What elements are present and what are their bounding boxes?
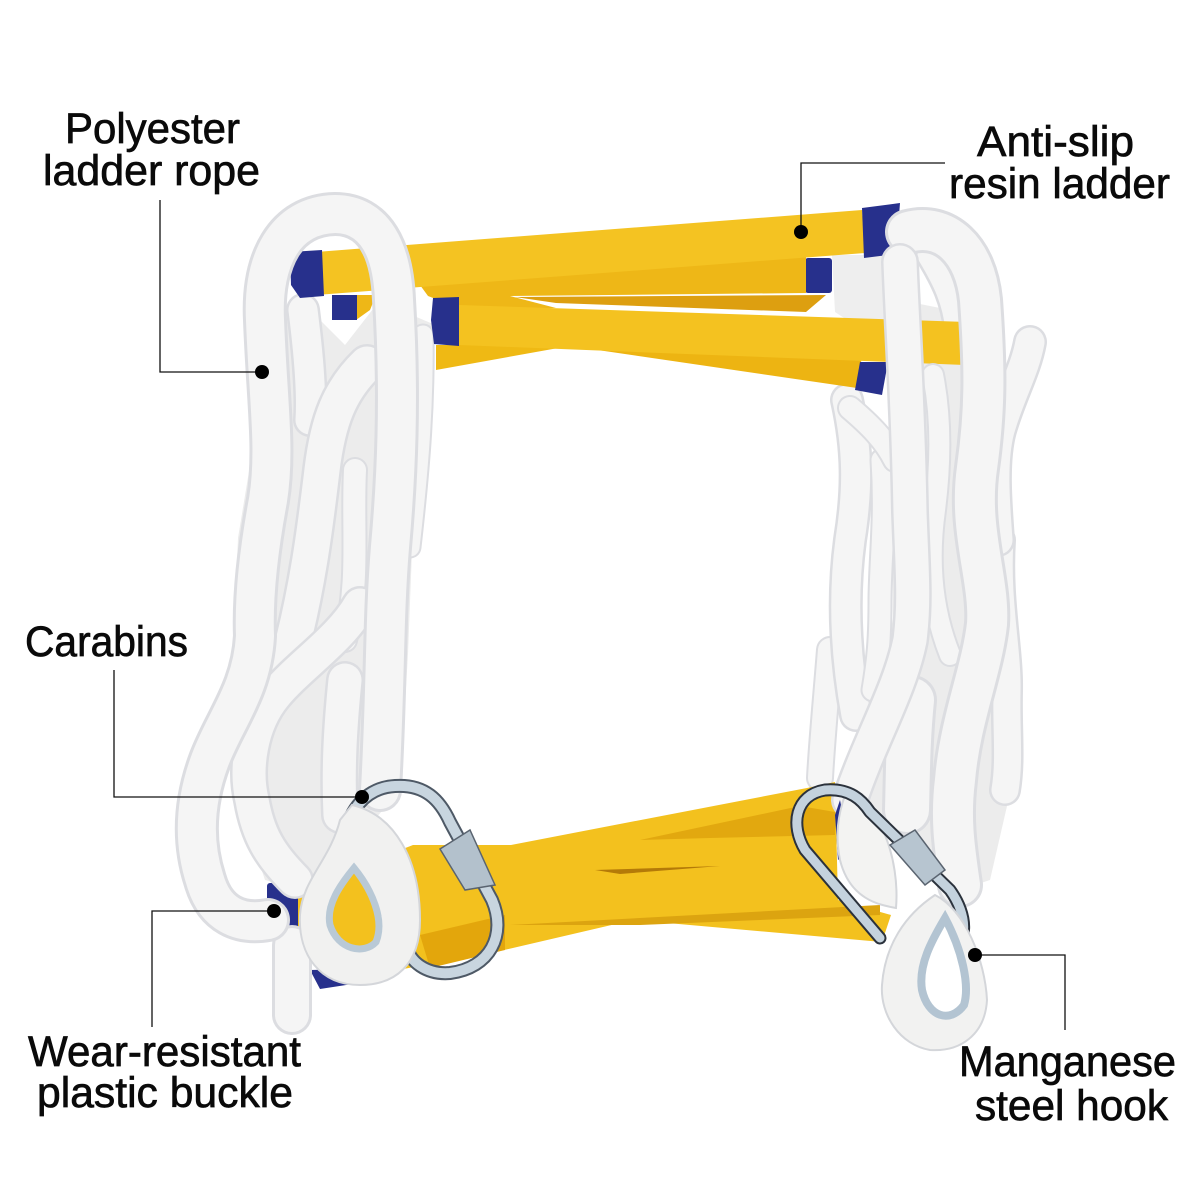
loop steel eye [329, 868, 379, 949]
leader line [114, 670, 362, 797]
rope teardrop [838, 795, 897, 908]
bottom ladder rungs [267, 782, 891, 989]
heading line two: plastic buckle [37, 1069, 293, 1117]
leader line [160, 200, 262, 372]
hook eye [921, 918, 966, 1016]
inner strand [287, 364, 367, 665]
left rope mass [233, 300, 433, 890]
thimble rope loop [300, 805, 420, 985]
blue sliver [372, 362, 382, 383]
carabiner locking sleeve [440, 830, 495, 890]
callout: polyester ladder rope [43, 105, 269, 379]
carabiner body [797, 790, 964, 955]
upper rung left cap [290, 250, 324, 298]
heading line two: ladder rope [43, 147, 260, 195]
rung small cap [332, 295, 357, 320]
main right ropes [850, 230, 1030, 885]
blue buckle left [267, 883, 298, 935]
blue buckle bottom [310, 968, 398, 989]
right outer rope [995, 342, 1030, 540]
callout: wear-resistant plastic buckle [28, 904, 301, 1117]
carabiner steel ring [343, 786, 497, 973]
left carabiner and rope loop [300, 786, 497, 985]
dot [255, 365, 269, 379]
rear rung right cap [805, 258, 832, 293]
lower strand [249, 605, 360, 880]
main rope: lower loop, left arm, arch and right arm [197, 214, 397, 921]
leader line [975, 955, 1065, 1030]
heading: Manganese [959, 1038, 1176, 1086]
main left ropes [197, 214, 397, 1015]
front yellow rung [459, 305, 967, 365]
right thin strand [932, 375, 950, 655]
dot [355, 790, 369, 804]
top rope behind rung [930, 255, 958, 330]
rear yellow rung [420, 256, 806, 308]
callout: anti-slip resin ladder [794, 118, 1170, 239]
upper rung right cap [862, 203, 900, 258]
leader line [152, 911, 274, 1027]
upper yellow rung [316, 210, 865, 295]
top ladder rungs [290, 203, 967, 395]
heading: Polyester [65, 105, 240, 153]
lower right rung piece [577, 347, 862, 388]
dark wedge [515, 295, 826, 312]
heading: Carabins [25, 618, 188, 666]
dot [794, 225, 808, 239]
heading line two: steel hook [975, 1082, 1168, 1130]
heading: Wear-resistant [28, 1028, 301, 1076]
heading: Anti-slip [977, 118, 1134, 166]
small yellow stub [356, 295, 376, 320]
dot [968, 948, 982, 962]
white buckle block [832, 255, 897, 345]
callout: carabins [25, 618, 369, 804]
yellow rung fan [298, 782, 891, 970]
front rung left cap [431, 297, 459, 346]
right inner rope [850, 262, 913, 800]
rung shadows [420, 806, 880, 968]
heading line two: resin ladder [949, 160, 1170, 208]
right rope mass [820, 255, 1013, 890]
right carabiner and rope loop [797, 790, 987, 1050]
dark backing [835, 800, 850, 860]
leader line [801, 163, 945, 232]
right arch rope [908, 230, 987, 885]
callout: manganese steel hook [959, 948, 1176, 1130]
diagonal strand [850, 408, 895, 460]
dot [267, 904, 281, 918]
hook rope loop [882, 895, 987, 1050]
front rung lower cap [855, 362, 888, 395]
hanging rope end [272, 945, 312, 1015]
lower left rung piece [436, 345, 575, 370]
carabiner sleeve [890, 830, 945, 885]
